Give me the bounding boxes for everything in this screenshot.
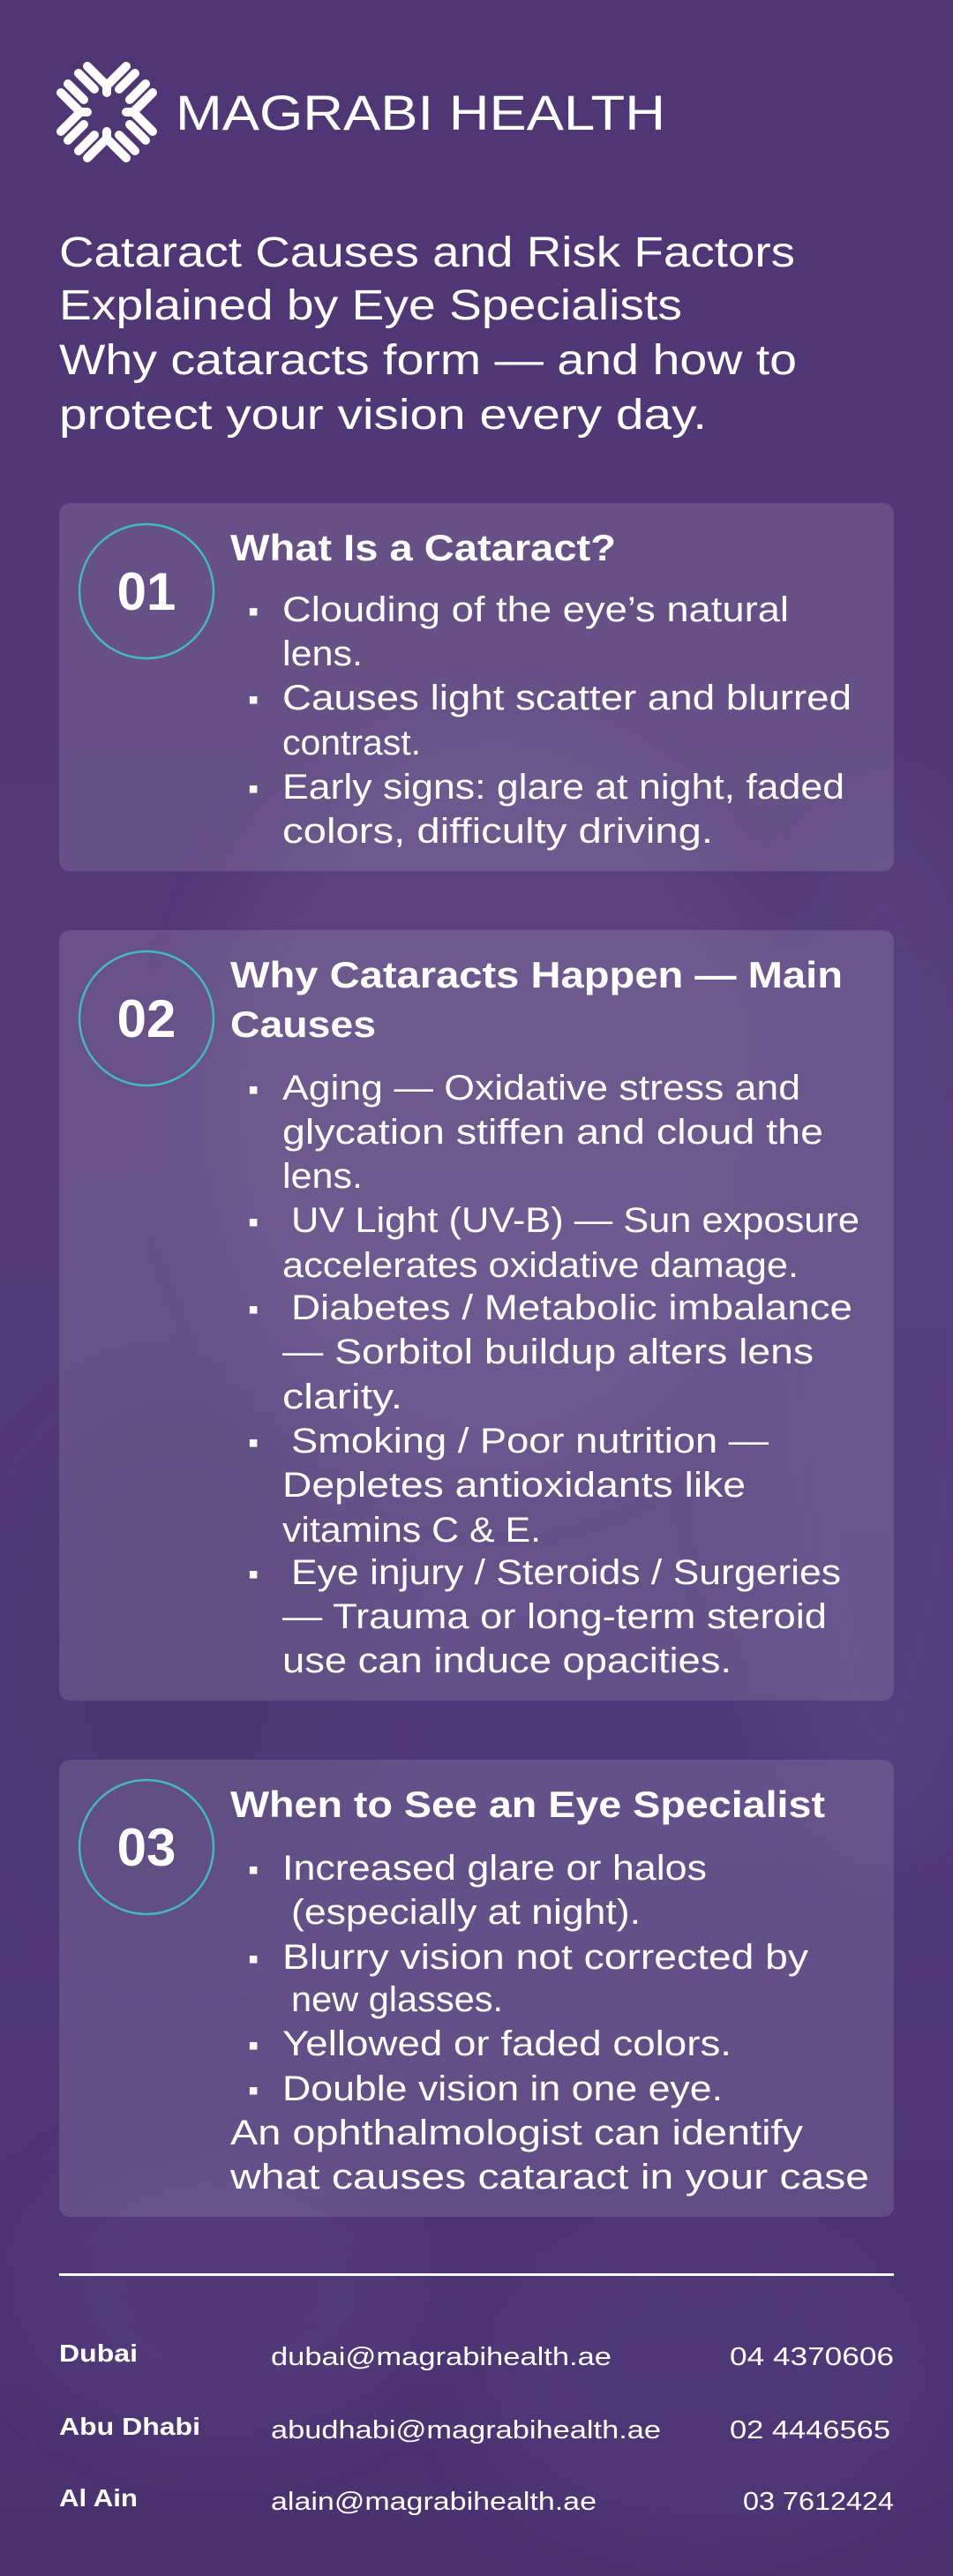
contact row: Al Ain: Al Ain	[59, 2484, 138, 2512]
title	[59, 229, 797, 439]
bullet list 02: Aging — Oxidative stress and	[282, 1069, 800, 1108]
bullet list 02: ▪	[248, 1558, 259, 1591]
bullet list 03: Yellowed or faded colors.	[282, 2024, 732, 2063]
contact row: Dubai: 04 4370606	[730, 2343, 894, 2371]
bullet list 02: lens.	[282, 1157, 363, 1196]
contact row: Abu Dhabi: Abu Dhabi	[59, 2413, 200, 2440]
contact row: Abu Dhabi: abudhabi@magrabihealth.ae	[271, 2416, 661, 2445]
bullet list 02: use can induce opacities.	[282, 1641, 732, 1680]
bullet list 03: Blurry vision not corrected by	[282, 1938, 808, 1977]
bullet list 02: Diabetes / Metabolic imbalance	[291, 1288, 852, 1327]
bullet list 03: ▪	[248, 1853, 259, 1887]
contact row: Dubai	[59, 2339, 894, 2371]
bullet list 03: ▪	[248, 2029, 259, 2062]
contact row: Dubai: dubai@magrabihealth.ae	[271, 2343, 612, 2371]
bullet list 01: ▪	[248, 683, 259, 717]
bullet list 01: ▪	[248, 595, 259, 628]
bullet list 03	[248, 1849, 808, 2108]
bullet list 03: (especially at night).	[291, 1893, 641, 1932]
bullet list 03: Increased glare or halos	[282, 1849, 707, 1888]
bullet list 02: ▪	[248, 1205, 259, 1239]
closing note	[229, 2114, 869, 2197]
contact row: Abu Dhabi	[59, 2413, 890, 2445]
closing note: An ophthalmologist can identify	[230, 2114, 803, 2152]
bullet list 02: Depletes antioxidants like	[282, 1466, 746, 1505]
closing note: what causes cataract in your case	[229, 2158, 869, 2197]
contact row: Al Ain: alain@magrabihealth.ae	[271, 2488, 597, 2516]
bullet list 01: Clouding of the eye’s natural	[282, 590, 789, 629]
bullet list 03: ▪	[248, 2074, 259, 2107]
bullet list 03: Double vision in one eye.	[282, 2069, 723, 2108]
number badge 01	[79, 524, 214, 658]
icon: logo mark	[61, 66, 153, 158]
heading 01: What Is a Cataract?	[230, 527, 616, 568]
bullet list 02: accelerates oxidative damage.	[282, 1246, 799, 1285]
panel: 03 when to see a specialist	[59, 1760, 894, 2217]
panel: 02 main causes	[59, 930, 894, 1701]
bullet list 01: Early signs: glare at night, faded	[282, 768, 844, 807]
contact row: Al Ain: 03 7612424	[743, 2488, 894, 2516]
panel: 01 what is a cataract	[59, 503, 894, 871]
number badge 02: 02	[117, 989, 176, 1048]
title: protect your vision every day.	[59, 392, 707, 439]
heading 03: When to See an Eye Specialist	[230, 1784, 825, 1825]
footer: contacts	[59, 2339, 894, 2516]
bullet list 01: lens.	[282, 635, 363, 673]
bullet list 02: UV Light (UV-B) — Sun exposure	[291, 1201, 859, 1240]
bullet list 02: Smoking / Poor nutrition —	[291, 1422, 769, 1461]
bullet list 01	[248, 590, 852, 851]
bullet list 01: ▪	[248, 772, 259, 806]
bullet list 01: contrast.	[282, 724, 421, 762]
bullet list 02	[248, 1069, 859, 1680]
number badge 03: 03	[117, 1818, 176, 1877]
bullet list 03: new glasses.	[291, 1980, 503, 2019]
number badge 01: 01	[117, 562, 176, 621]
bullet list 02: Eye injury / Steroids / Surgeries	[291, 1553, 841, 1592]
heading 02	[230, 954, 843, 1045]
bullet list 02: ▪	[248, 1073, 259, 1107]
bullet list 02: ▪	[248, 1293, 259, 1326]
contact row: Abu Dhabi: 02 4446565	[730, 2416, 890, 2445]
bullet list 01: colors, difficulty driving.	[282, 812, 713, 851]
logo wordmark: MAGRABI HEALTH	[176, 85, 665, 140]
title: Why cataracts form — and how to	[59, 337, 797, 384]
contact row: Dubai: Dubai	[59, 2339, 138, 2367]
bullet list 02: clarity.	[282, 1378, 402, 1416]
heading 02: Why Cataracts Happen — Main	[230, 954, 843, 995]
heading 02: Causes	[230, 1003, 376, 1045]
contact row: Al Ain	[59, 2484, 894, 2516]
bullet list 02: — Trauma or long-term steroid	[282, 1597, 827, 1636]
number badge 02	[79, 951, 214, 1085]
bullet list 02: ▪	[248, 1426, 259, 1460]
bullet list 01: Causes light scatter and blurred	[282, 679, 852, 717]
title: Cataract Causes and Risk Factors	[59, 229, 795, 276]
bullet list 02: vitamins C & E.	[282, 1511, 541, 1550]
number badge 03	[79, 1780, 214, 1914]
title: Explained by Eye Specialists	[59, 282, 682, 329]
bullet list 02: — Sorbitol buildup alters lens	[282, 1333, 814, 1371]
bullet list 03: ▪	[248, 1942, 259, 1976]
bullet list 02: glycation stiffen and cloud the	[282, 1113, 823, 1152]
logo	[61, 66, 665, 158]
